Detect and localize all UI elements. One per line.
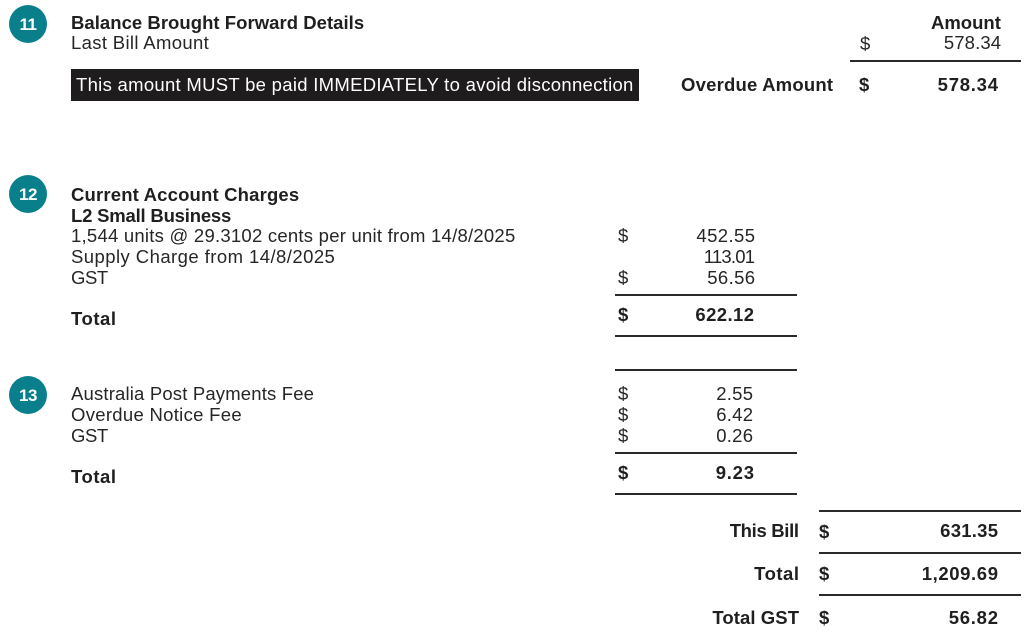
last bill amount label: Last Bill Amount bbox=[71, 32, 209, 53]
GST dollar sign: $ bbox=[618, 267, 628, 288]
GST value: 56.56 bbox=[707, 267, 755, 288]
overdue amount label: Overdue Amount bbox=[681, 74, 833, 95]
post fee value: 2.55 bbox=[716, 383, 753, 404]
units line: 1,544 units @ 29.3102 cents per unit from 14/8/2025 bbox=[71, 225, 515, 246]
grand total value: 1,209.69 bbox=[922, 563, 999, 584]
grand total label: Total bbox=[754, 563, 800, 584]
grand total dollar sign: $ bbox=[819, 563, 829, 584]
badge 12 bbox=[9, 175, 47, 213]
this bill dollar sign: $ bbox=[819, 521, 829, 542]
fee GST dollar sign: $ bbox=[618, 425, 628, 446]
heading: current account charges: Current Account Charges bbox=[71, 184, 299, 205]
fee GST label: GST bbox=[71, 425, 108, 446]
total GST label: Total GST bbox=[712, 607, 799, 628]
post fee label: Australia Post Payments Fee bbox=[71, 383, 314, 404]
amount heading: Amount bbox=[931, 12, 1001, 33]
fee GST value: 0.26 bbox=[716, 425, 753, 446]
units value: 452.55 bbox=[696, 225, 755, 246]
fees total dollar sign: $ bbox=[618, 462, 628, 483]
badge 11: 11 bbox=[20, 15, 36, 34]
total value: 622.12 bbox=[695, 304, 754, 325]
supply charge value: 113.01 bbox=[704, 246, 754, 267]
badge 13: 13 bbox=[19, 386, 37, 405]
GST line: GST bbox=[71, 267, 108, 288]
last bill value: 578.34 bbox=[944, 32, 1001, 53]
total dollar sign: $ bbox=[618, 304, 628, 325]
this bill value: 631.35 bbox=[940, 520, 998, 541]
overdue fee dollar sign: $ bbox=[618, 404, 628, 425]
badge 12: 12 bbox=[19, 185, 37, 204]
disconnection warning bbox=[71, 69, 639, 101]
badge 13 bbox=[9, 376, 47, 414]
overdue value: 578.34 bbox=[938, 74, 999, 95]
total label: Total bbox=[71, 308, 117, 329]
subheading: L2 small business: L2 Small Business bbox=[71, 205, 231, 226]
fees total label: Total bbox=[71, 466, 117, 487]
overdue dollar sign: $ bbox=[859, 74, 869, 95]
heading: balance brought forward: Balance Brought Forward Details bbox=[71, 12, 364, 33]
disconnection warning: This amount MUST be paid IMMEDIATELY to avoid disconnection bbox=[76, 74, 634, 95]
fees total value: 9.23 bbox=[716, 462, 755, 483]
badge 11 bbox=[9, 5, 47, 43]
this bill label: This Bill bbox=[730, 520, 799, 541]
total GST value: 56.82 bbox=[949, 607, 999, 628]
overdue fee label: Overdue Notice Fee bbox=[71, 404, 242, 425]
post fee dollar sign: $ bbox=[618, 383, 628, 404]
overdue fee value: 6.42 bbox=[716, 404, 753, 425]
supply charge line: Supply Charge from 14/8/2025 bbox=[71, 246, 335, 267]
units dollar sign: $ bbox=[618, 225, 628, 246]
last bill dollar sign: $ bbox=[860, 33, 870, 54]
total GST dollar sign: $ bbox=[819, 607, 829, 628]
